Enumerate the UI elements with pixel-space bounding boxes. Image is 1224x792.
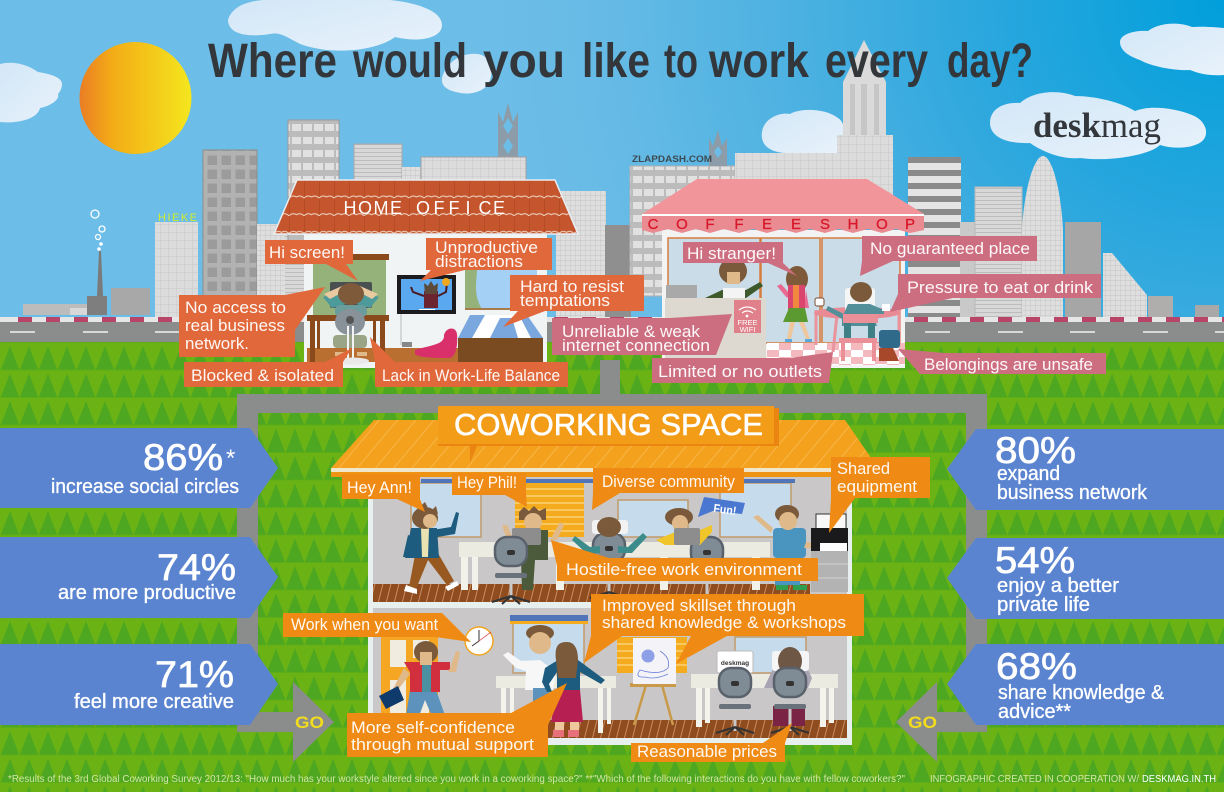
skyline: ZLAPDASH sign: ZLAPDASH.COM (632, 154, 712, 165)
panel: home office (274, 180, 578, 368)
laptop with deskmag screen (717, 651, 753, 673)
awning (642, 179, 924, 214)
man with briefcase (379, 641, 460, 735)
credit line: INFOGRAPHIC CREATED IN COOPERATION W/ (930, 773, 1139, 785)
callout: self-confidence: More self-confidence (351, 718, 515, 737)
panel: stat 86 percent: increase social circles (51, 476, 239, 498)
panel: stat 68 percent: share knowledge & (998, 682, 1165, 704)
title: would (352, 35, 467, 88)
callout: no access: No access to (185, 298, 286, 317)
teal-shirted worker (572, 517, 647, 553)
panel: coworking space (331, 420, 878, 745)
callout: improved skillset (584, 594, 864, 664)
lower left desk (496, 676, 616, 733)
callout: hey phil: Hey Phil! (457, 473, 517, 492)
title: day? (947, 35, 1033, 88)
panel: stat 68 percent (947, 644, 1224, 725)
callout: lack in work-life balance (370, 337, 568, 387)
panel: stat 71 percent: feel more creative (74, 691, 234, 713)
panel: stat 80 percent (947, 429, 1224, 510)
outer wall (368, 470, 852, 745)
callout: improved skillset: Improved skillset through (602, 596, 796, 615)
valance with scallops (642, 216, 924, 233)
callout: blocked and isolated (184, 348, 352, 387)
free wifi sign: FREE (737, 318, 758, 327)
callout: reasonable prices: Reasonable prices (637, 742, 777, 761)
laptop with deskmag screen: deskmag (721, 660, 749, 667)
footnote: *Results of the 3rd Global Coworking Survey 2012/13: "How much has your workstyle altered since you work in a coworking space?" **"Which of the following interactions do you have with fellow coworkers?" (8, 773, 905, 785)
checker floor (767, 343, 905, 365)
sun (80, 42, 192, 154)
callout: hi stranger (683, 242, 797, 276)
callout: self-confidence (347, 683, 567, 757)
title (208, 35, 1033, 88)
printer and cabinet (811, 514, 848, 592)
callouts: coworking space (283, 457, 930, 762)
callout: unreliable internet (552, 314, 732, 355)
sky background (0, 0, 1224, 345)
seated woman in grey top (764, 647, 812, 726)
coffee shop sign: COFFEESHOP (648, 216, 915, 233)
roof (331, 420, 878, 468)
seated man at table (814, 282, 900, 361)
roof eave (331, 468, 878, 477)
skyline: left small buildings and chimney (23, 210, 150, 315)
clouds (0, 0, 1224, 159)
panel: coffee shop (642, 179, 924, 368)
callout: hi screen (265, 240, 358, 281)
callout: limited outlets: Limited or no outlets (658, 362, 822, 381)
callout: hey ann: Hey Ann! (347, 478, 412, 497)
callout: no access (179, 287, 325, 357)
title: to (664, 35, 698, 88)
callout: work when you want: Work when you want (291, 615, 438, 634)
callout: unproductive distractions: Unproductive (435, 238, 538, 257)
callout: diverse community: Diverse community (602, 472, 735, 491)
go arrow labels: GO (908, 713, 937, 732)
lower floor door (381, 633, 438, 738)
man Ann greeting (403, 502, 459, 594)
callout: unreliable internet: internet connection (562, 336, 710, 355)
roof (274, 180, 578, 234)
clock (465, 627, 493, 655)
title: Where (208, 35, 337, 88)
easel with drawing (630, 638, 676, 725)
callout: hi stranger: Hi stranger! (687, 244, 776, 263)
callouts: home office (179, 238, 644, 387)
panel: stat 54 percent (947, 538, 1224, 619)
house wall (304, 232, 547, 368)
callout: fun (698, 497, 745, 518)
callout: lack in work-life balance: Lack in Work-Life Balance (382, 366, 560, 385)
barista (705, 258, 763, 300)
callout: unreliable internet: Unreliable & weak (562, 322, 701, 341)
lower right desk (691, 674, 838, 727)
woman customer (777, 266, 812, 342)
callout: pressure to eat or drink (890, 274, 1101, 312)
upper floor interior (373, 477, 847, 602)
upper desk (459, 542, 770, 590)
bag (879, 330, 900, 361)
callout: limited outlets (652, 352, 833, 383)
callout: diverse community (592, 468, 744, 510)
callout: no access: network. (185, 334, 249, 353)
lower wood floor (373, 720, 847, 738)
free wifi sign: WIFI (740, 325, 755, 334)
road (0, 317, 1224, 342)
shop window glass (668, 238, 900, 343)
callout: unproductive distractions: distractions (435, 252, 523, 271)
deskmag logo: deskmag (1033, 106, 1161, 145)
grass (0, 342, 1224, 792)
callout: no access: real business (185, 316, 285, 335)
callout: self-confidence: through mutual support (351, 735, 534, 754)
credit line: DESKMAG.IN.TH (1142, 773, 1216, 785)
shop wall (662, 230, 905, 368)
callout: hard to resist temptations: Hard to resist (520, 277, 624, 296)
bed (458, 315, 543, 362)
panel: stat 80 percent: business network (997, 482, 1148, 504)
panel: stat 74 percent (0, 537, 278, 618)
free wifi sign (734, 300, 761, 334)
man in white shirt (503, 625, 556, 708)
panel: stat 68 percent: advice** (998, 701, 1071, 723)
lower windows (510, 615, 806, 673)
callout: hostile-free (551, 540, 818, 581)
skyline (23, 40, 1219, 319)
panel: stat 54 percent: private life (997, 594, 1090, 616)
callout: blocked and isolated: Blocked & isolated (191, 366, 334, 385)
go arrow labels (295, 713, 937, 732)
wooden floor (307, 348, 543, 362)
callout: hostile-free: Hostile-free work environment (566, 560, 802, 579)
callouts: coffee shop (552, 236, 1106, 383)
callout: hey ann (342, 474, 425, 512)
standing man blue shirt (753, 505, 825, 590)
panel: stat 86 percent: * (226, 445, 235, 472)
path between buildings (237, 360, 987, 762)
chairs lower floor (716, 668, 809, 735)
panel: stat 54 percent: 54% (995, 540, 1075, 581)
panel: stat 80 percent: 80% (995, 430, 1076, 471)
panel: stat 74 percent: 74% (157, 547, 236, 588)
callout: shared equipment: equipment (837, 477, 917, 496)
callout: hard to resist temptations (503, 275, 644, 327)
callout: no guaranteed place (860, 236, 1037, 276)
title: every (825, 35, 928, 88)
callout: unproductive distractions (420, 238, 552, 281)
coffee machine (666, 285, 697, 298)
curtain and rod (313, 254, 389, 315)
heading banner: coworking space (438, 406, 779, 463)
callout: reasonable prices (631, 723, 792, 762)
yellow-shirted worker (656, 508, 712, 545)
title: like (582, 35, 650, 88)
callout: work when you want (283, 613, 471, 642)
counter (665, 298, 766, 358)
television (397, 275, 456, 347)
go arrow labels: GO (295, 713, 324, 732)
callout: improved skillset: shared knowledge & workshops (602, 613, 846, 632)
lower floor interior (373, 608, 847, 738)
callout: belongings unsafe: Belongings are unsafe (924, 355, 1093, 374)
heading banner: coworking space: COWORKING SPACE (454, 407, 763, 442)
man Phil with laptop (502, 506, 564, 590)
window (465, 270, 537, 310)
upper floor windows (411, 479, 795, 537)
title: work (708, 35, 809, 88)
woman standing at desk (542, 642, 605, 737)
callout: hi screen: Hi screen! (269, 243, 345, 262)
desk with worker (307, 282, 389, 364)
skyline: HIEKE building: HIEKE (158, 212, 197, 224)
title: you (483, 35, 565, 88)
callout: no guaranteed place: No guaranteed place (870, 239, 1030, 258)
panel: stat 68 percent: 68% (996, 646, 1077, 687)
callout: shared equipment (829, 457, 930, 533)
panel: stat 71 percent: 71% (155, 654, 234, 695)
callout: shared equipment: Shared (837, 459, 890, 478)
callout: hard to resist temptations: temptations (520, 291, 610, 310)
chairs upper floor (492, 533, 726, 604)
skyline: spire tower (837, 40, 893, 195)
roof sign: HOME OFFICE (344, 198, 505, 218)
skyline: HIEKE building (155, 212, 198, 318)
panel: stat 86 percent: 86% (143, 437, 223, 478)
panel: stat 86 percent (0, 428, 278, 508)
panel: stat 71 percent (0, 644, 278, 725)
callout: pressure to eat or drink: Pressure to eat or drink (907, 278, 1094, 297)
callout: hey phil (452, 473, 527, 507)
panel: stat 74 percent: are more productive (58, 582, 236, 604)
panel: stat 54 percent: enjoy a better (997, 575, 1119, 597)
pink cushion (415, 328, 457, 358)
panel: stat 80 percent: expand (997, 463, 1060, 485)
upper wood floor (373, 584, 810, 602)
callout: fun: Fun! (713, 501, 737, 518)
callout: belongings unsafe (898, 349, 1106, 374)
